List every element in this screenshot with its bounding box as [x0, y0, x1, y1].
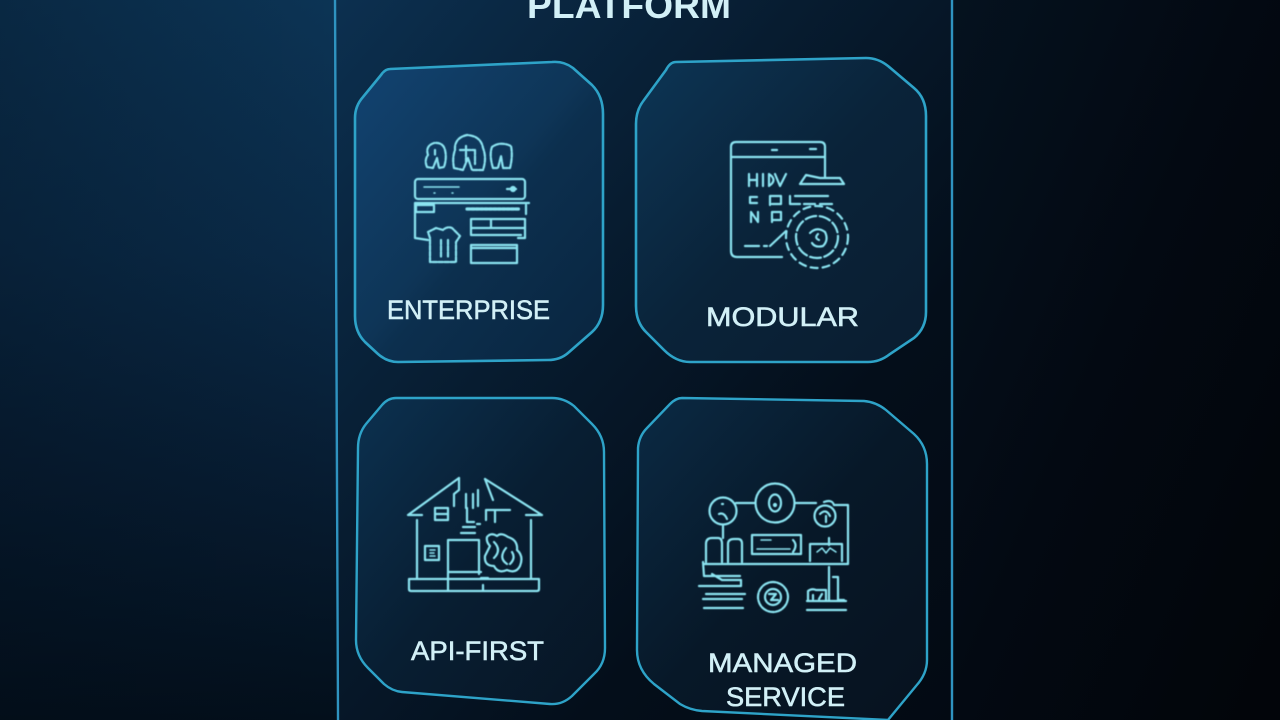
- central panel: [335, 0, 952, 720]
- label: api-first: API-FIRST: [411, 636, 544, 666]
- panel: api-first: [356, 398, 605, 704]
- card outline: managed service: [637, 398, 927, 720]
- icon: house: [408, 478, 542, 591]
- panel: modular: [636, 58, 926, 362]
- panel: enterprise: [355, 62, 603, 362]
- icon: tablet with gear: [731, 142, 848, 268]
- label: enterprise: ENTERPRISE: [387, 295, 550, 325]
- card outline: modular: [636, 58, 926, 362]
- icon: enterprise team and dashboard: [415, 135, 529, 263]
- icon: managed service network: [699, 484, 848, 612]
- card outline: api-first: [356, 398, 605, 704]
- label line: service: SERVICE: [726, 682, 845, 712]
- label: managed service: [708, 648, 857, 712]
- label: modular: MODULAR: [706, 302, 859, 332]
- label line: managed: MANAGED: [708, 648, 857, 678]
- card outline: enterprise: [355, 62, 603, 362]
- panel: managed service: [637, 398, 927, 720]
